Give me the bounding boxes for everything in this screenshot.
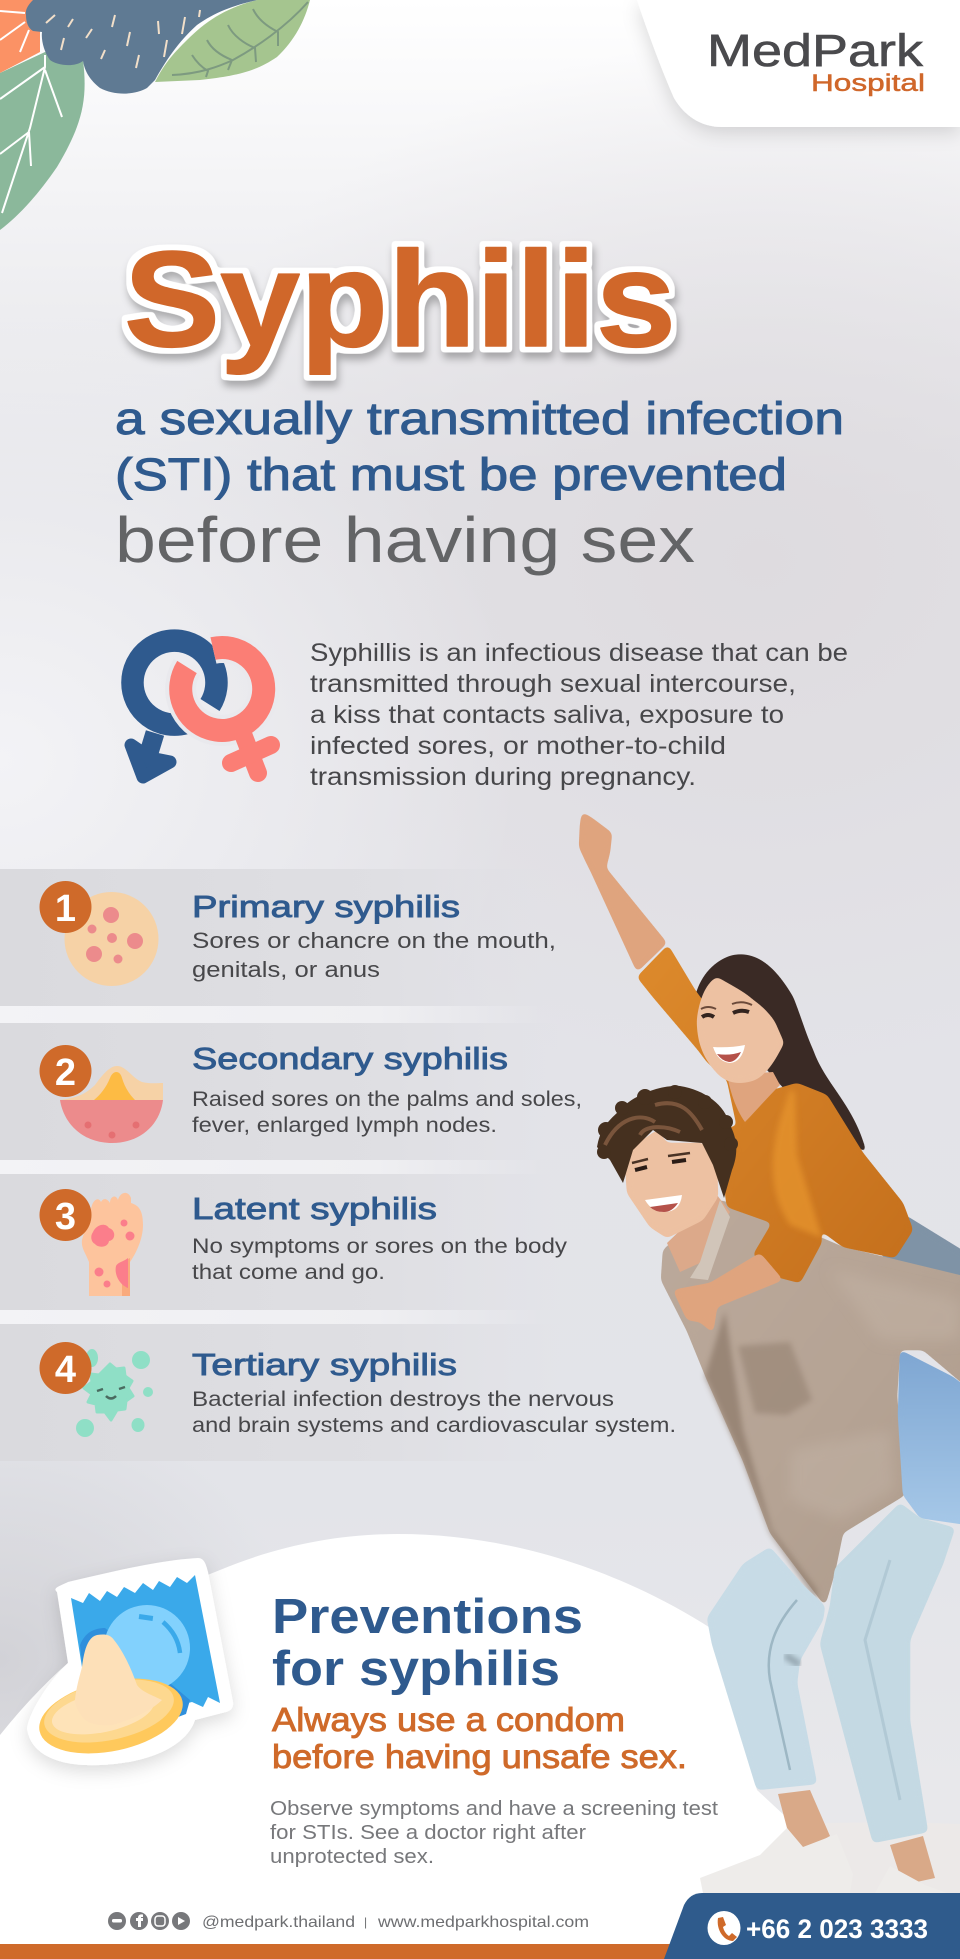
man's shirt bbox=[661, 1200, 960, 1606]
footer social icons bbox=[108, 1912, 190, 1930]
icon: skin with sores bbox=[64, 892, 158, 986]
prevention paragraph: for STIs. See a doctor right after bbox=[270, 1822, 586, 1844]
heading: secondary syphilis: Secondary syphilis bbox=[192, 1041, 508, 1076]
description: secondary syphilis: fever, enlarged lymph nodes. bbox=[192, 1114, 497, 1137]
man's features bbox=[632, 1153, 690, 1212]
prevention subheading: Always use a condom bbox=[272, 1701, 625, 1738]
prevention heading bbox=[272, 1590, 583, 1696]
number badge 2 bbox=[40, 1045, 92, 1097]
description: tertiary syphilis: and brain systems and cardiovascular system. bbox=[192, 1414, 676, 1437]
heading: primary syphilis: Primary syphilis bbox=[192, 889, 460, 924]
jean seams and shadows bbox=[769, 1560, 900, 1800]
phone number: +66 2 023 3333 bbox=[746, 1914, 928, 1944]
intro paragraph: Syphillis is an infectious disease that can be bbox=[310, 639, 848, 667]
icon: hand with rash bbox=[82, 1193, 143, 1296]
orange top folds bbox=[773, 1090, 822, 1238]
prevention heading: for syphilis bbox=[272, 1642, 560, 1696]
icon: bacteria bbox=[76, 1349, 153, 1437]
icon: raised sore on skin bbox=[60, 1066, 163, 1143]
number badge 3 bbox=[40, 1189, 92, 1241]
title: Syphilis bbox=[124, 223, 676, 375]
stage 1: primary syphilis bbox=[40, 881, 556, 986]
orange footer bar bbox=[0, 1944, 680, 1959]
phone panel bbox=[664, 1893, 960, 1959]
intro paragraph: transmitted through sexual intercourse, bbox=[310, 670, 796, 698]
description: latent syphilis: that come and go. bbox=[192, 1261, 385, 1284]
number badge 3: 3 bbox=[55, 1196, 76, 1238]
woman forearm around neck bbox=[673, 1253, 783, 1333]
number badge 1: 1 bbox=[55, 888, 76, 930]
prevention subheading: before having unsafe sex. bbox=[272, 1738, 687, 1775]
band backgrounds bbox=[0, 869, 560, 1461]
heading: tertiary syphilis: Tertiary syphilis bbox=[192, 1347, 457, 1382]
description: latent syphilis: No symptoms or sores on the body bbox=[192, 1235, 568, 1258]
prevention paragraph: Observe symptoms and have a screening test bbox=[270, 1798, 718, 1820]
left shoe bbox=[700, 1828, 853, 1893]
intro paragraph: a kiss that contacts saliva, exposure to bbox=[310, 701, 784, 729]
subtitle: before having sex bbox=[115, 504, 695, 576]
logo hospital word: Hospital bbox=[811, 70, 925, 97]
footer links bbox=[202, 1914, 589, 1931]
description: secondary syphilis: Raised sores on the palms and soles, bbox=[192, 1088, 582, 1111]
number badge 4 bbox=[40, 1342, 92, 1394]
woman's neck bbox=[727, 1072, 780, 1122]
subtitle: (STI) that must be prevented bbox=[115, 449, 787, 500]
prevention heading: Preventions bbox=[272, 1590, 583, 1644]
floor bbox=[800, 1822, 960, 1900]
man's left jean leg bbox=[707, 1547, 825, 1790]
icon: condom packet bbox=[27, 1558, 233, 1765]
footer links: @medpark.thailand bbox=[202, 1914, 355, 1931]
footer links: | bbox=[364, 1915, 367, 1929]
description: primary syphilis: Sores or chancre on the mouth, bbox=[192, 928, 556, 953]
woman's jeans upper bbox=[880, 1215, 960, 1282]
prevention paragraph bbox=[270, 1798, 718, 1868]
icon: gender symbols bbox=[131, 641, 271, 777]
man's face bbox=[625, 1130, 718, 1238]
description: tertiary syphilis: Bacterial infection destroys the nervous bbox=[192, 1388, 614, 1411]
white dome panel bbox=[0, 1534, 800, 1959]
prevention paragraph: unprotected sex. bbox=[270, 1846, 434, 1868]
subtitle bbox=[115, 393, 844, 576]
number badge 2: 2 bbox=[55, 1052, 76, 1094]
description: secondary syphilis bbox=[192, 1088, 582, 1137]
intro paragraph bbox=[310, 639, 848, 791]
woman raised arm bbox=[579, 812, 667, 972]
photo: couple piggyback bbox=[579, 812, 960, 1893]
icon: phone bbox=[708, 1911, 740, 1945]
right ankle bbox=[890, 1836, 935, 1885]
footer links: www.medparkhospital.com bbox=[377, 1914, 589, 1931]
woman's face bbox=[697, 977, 784, 1083]
woman's jeans leg bbox=[898, 1350, 960, 1526]
man's right jean leg bbox=[820, 1503, 955, 1843]
stage 4: tertiary syphilis bbox=[40, 1342, 676, 1437]
woman orange top bbox=[637, 945, 913, 1283]
logo wordmark: MedPark bbox=[707, 25, 924, 76]
heading: latent syphilis: Latent syphilis bbox=[192, 1191, 437, 1226]
man's neck bbox=[667, 1195, 730, 1272]
number badge 4: 4 bbox=[55, 1349, 76, 1391]
description: latent syphilis bbox=[192, 1235, 568, 1284]
woman's features bbox=[701, 1002, 752, 1063]
stage 2: secondary syphilis bbox=[40, 1041, 582, 1143]
prevention subheading bbox=[272, 1701, 687, 1775]
intro paragraph: transmission during pregnancy. bbox=[310, 763, 696, 791]
shirt shading bbox=[705, 1270, 960, 1602]
logo panel bbox=[637, 0, 960, 127]
description: primary syphilis: genitals, or anus bbox=[192, 957, 380, 982]
right shoe bbox=[875, 1866, 947, 1893]
description: primary syphilis bbox=[192, 928, 556, 982]
description: tertiary syphilis bbox=[192, 1388, 676, 1437]
woman hair bbox=[693, 955, 867, 1155]
intro paragraph: infected sores, or mother-to-child bbox=[310, 732, 726, 760]
subtitle: a sexually transmitted infection bbox=[115, 393, 844, 444]
man's collar bbox=[690, 1200, 730, 1280]
man's hair bbox=[597, 1085, 738, 1198]
left ankle bbox=[778, 1790, 830, 1851]
stage 3: latent syphilis bbox=[40, 1189, 568, 1296]
number badge 1 bbox=[40, 881, 92, 933]
decorative leaves top-left bbox=[0, 0, 310, 230]
